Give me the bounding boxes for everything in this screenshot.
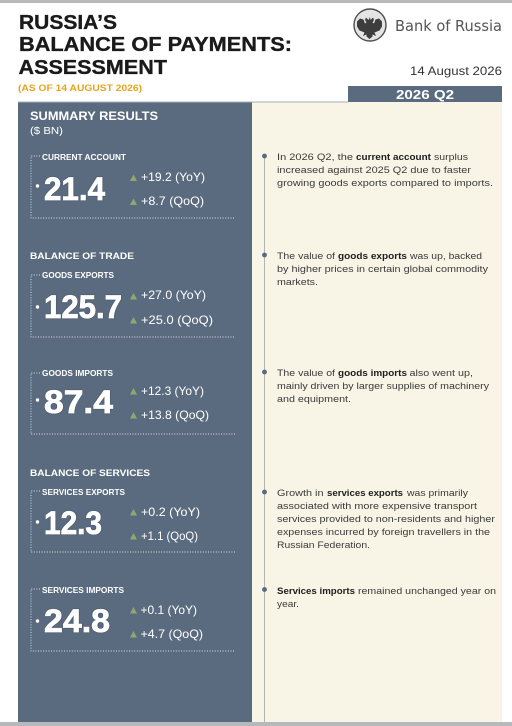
heading: balance of services: BALANCE OF SERVICES bbox=[30, 468, 150, 479]
panel: summary results bbox=[18, 102, 348, 722]
metric: current account: +19.2 (YoY) bbox=[141, 170, 205, 184]
commentary: services exports: associated with more expensive transport bbox=[277, 501, 477, 512]
logo: Bank of Russia: Bank of Russia bbox=[395, 17, 502, 35]
metric: services exports: +0.2 (YoY) bbox=[141, 505, 200, 519]
commentary: current account: surplus bbox=[434, 152, 468, 163]
metric: services imports bbox=[31, 586, 235, 651]
subtitle: as-of date: (AS OF 14 AUGUST 2026) bbox=[18, 83, 142, 94]
metric: goods exports: +25.0 (QoQ) bbox=[141, 313, 213, 327]
period tab: 2026 Q2 bbox=[396, 88, 454, 102]
heading: summary results bbox=[30, 111, 158, 137]
metric: services exports: 12.3 bbox=[44, 505, 102, 541]
commentary: current account: In 2026 Q2, the bbox=[277, 152, 353, 163]
commentary: services exports: services exports bbox=[327, 488, 403, 499]
commentary: services exports: Russian Federation. bbox=[277, 540, 370, 551]
metric: goods exports: 125.7 bbox=[44, 289, 122, 325]
metric: services imports: SERVICES IMPORTS bbox=[42, 586, 125, 595]
commentary: goods exports: by higher prices in certain global commodity bbox=[277, 264, 488, 275]
commentary: goods exports bbox=[262, 251, 488, 288]
logo: Bank of Russia bbox=[354, 9, 502, 41]
commentary: goods exports: markets. bbox=[277, 277, 318, 288]
commentary: goods exports: The value of bbox=[277, 251, 335, 262]
commentary: services exports bbox=[262, 488, 496, 551]
publication date: 14 August 2026 bbox=[410, 66, 502, 78]
metric: goods imports: +13.8 (QoQ) bbox=[141, 408, 209, 422]
metric: current account: 21.4 bbox=[44, 171, 105, 207]
metric: services exports: +1.1 (QoQ) bbox=[141, 529, 198, 543]
commentary: services imports: Services imports bbox=[277, 586, 355, 597]
metric: goods imports bbox=[31, 369, 235, 434]
metric: current account: CURRENT ACCOUNT bbox=[42, 153, 126, 162]
metric: services imports: +4.7 (QoQ) bbox=[140, 627, 203, 641]
metric: goods imports: 87.4 bbox=[44, 384, 113, 420]
commentary: goods imports: goods imports bbox=[338, 368, 407, 379]
metric: services imports: 24.8 bbox=[44, 603, 110, 639]
metric: services exports: SERVICES EXPORTS bbox=[42, 488, 126, 497]
metric: goods imports: +12.3 (YoY) bbox=[141, 384, 204, 398]
metric: goods exports: +27.0 (YoY) bbox=[141, 288, 206, 302]
title bbox=[18, 12, 292, 79]
heading: balance of trade: BALANCE OF TRADE bbox=[30, 251, 134, 262]
commentary: services imports bbox=[262, 586, 496, 610]
metric: current account bbox=[31, 153, 235, 218]
commentary: goods exports: was up, backed bbox=[409, 251, 482, 262]
commentary: goods imports: mainly driven by larger supplies of machinery bbox=[277, 381, 489, 392]
commentary: goods exports: goods exports bbox=[338, 251, 407, 262]
commentary: goods imports bbox=[262, 368, 489, 405]
commentary: goods imports: The value of bbox=[277, 368, 335, 379]
commentary: current account bbox=[262, 152, 493, 189]
period tab bbox=[348, 86, 502, 102]
commentary: services imports: remained unchanged year on bbox=[358, 586, 496, 597]
metric: services exports bbox=[31, 488, 235, 552]
metric: current account: +8.7 (QoQ) bbox=[141, 194, 204, 208]
title: BALANCE OF PAYMENTS: bbox=[19, 34, 292, 56]
title: ASSESSMENT bbox=[18, 57, 167, 79]
commentary: current account: current account bbox=[356, 152, 432, 163]
commentary: services exports: services provided to non-residents and higher bbox=[277, 514, 496, 525]
commentary: services exports: Growth in bbox=[277, 488, 324, 499]
commentary: current account: growing goods exports compared to imports. bbox=[277, 178, 493, 189]
timeline line bbox=[264, 156, 265, 722]
commentary: goods imports: also went up, bbox=[410, 368, 473, 379]
heading: summary results: SUMMARY RESULTS bbox=[30, 111, 158, 123]
panel: commentary background bbox=[252, 102, 502, 722]
metric: goods exports: GOODS EXPORTS bbox=[42, 271, 115, 280]
commentary: services exports: expenses incurred by foreign travellers in the bbox=[277, 527, 490, 538]
metric: goods exports bbox=[31, 271, 235, 337]
icon: double-headed eagle emblem bbox=[354, 9, 386, 41]
title: RUSSIA’S bbox=[19, 12, 117, 34]
metric: services imports: +0.1 (YoY) bbox=[140, 603, 197, 617]
commentary: services exports: was primarily bbox=[406, 488, 468, 499]
commentary: services imports: year. bbox=[277, 599, 299, 610]
heading: summary results: ($ BN) bbox=[30, 126, 63, 137]
commentary: goods imports: and equipment. bbox=[277, 394, 351, 405]
commentary: current account: increased against 2025 Q2 due to faster bbox=[277, 165, 472, 176]
metric: goods imports: GOODS IMPORTS bbox=[42, 369, 114, 378]
